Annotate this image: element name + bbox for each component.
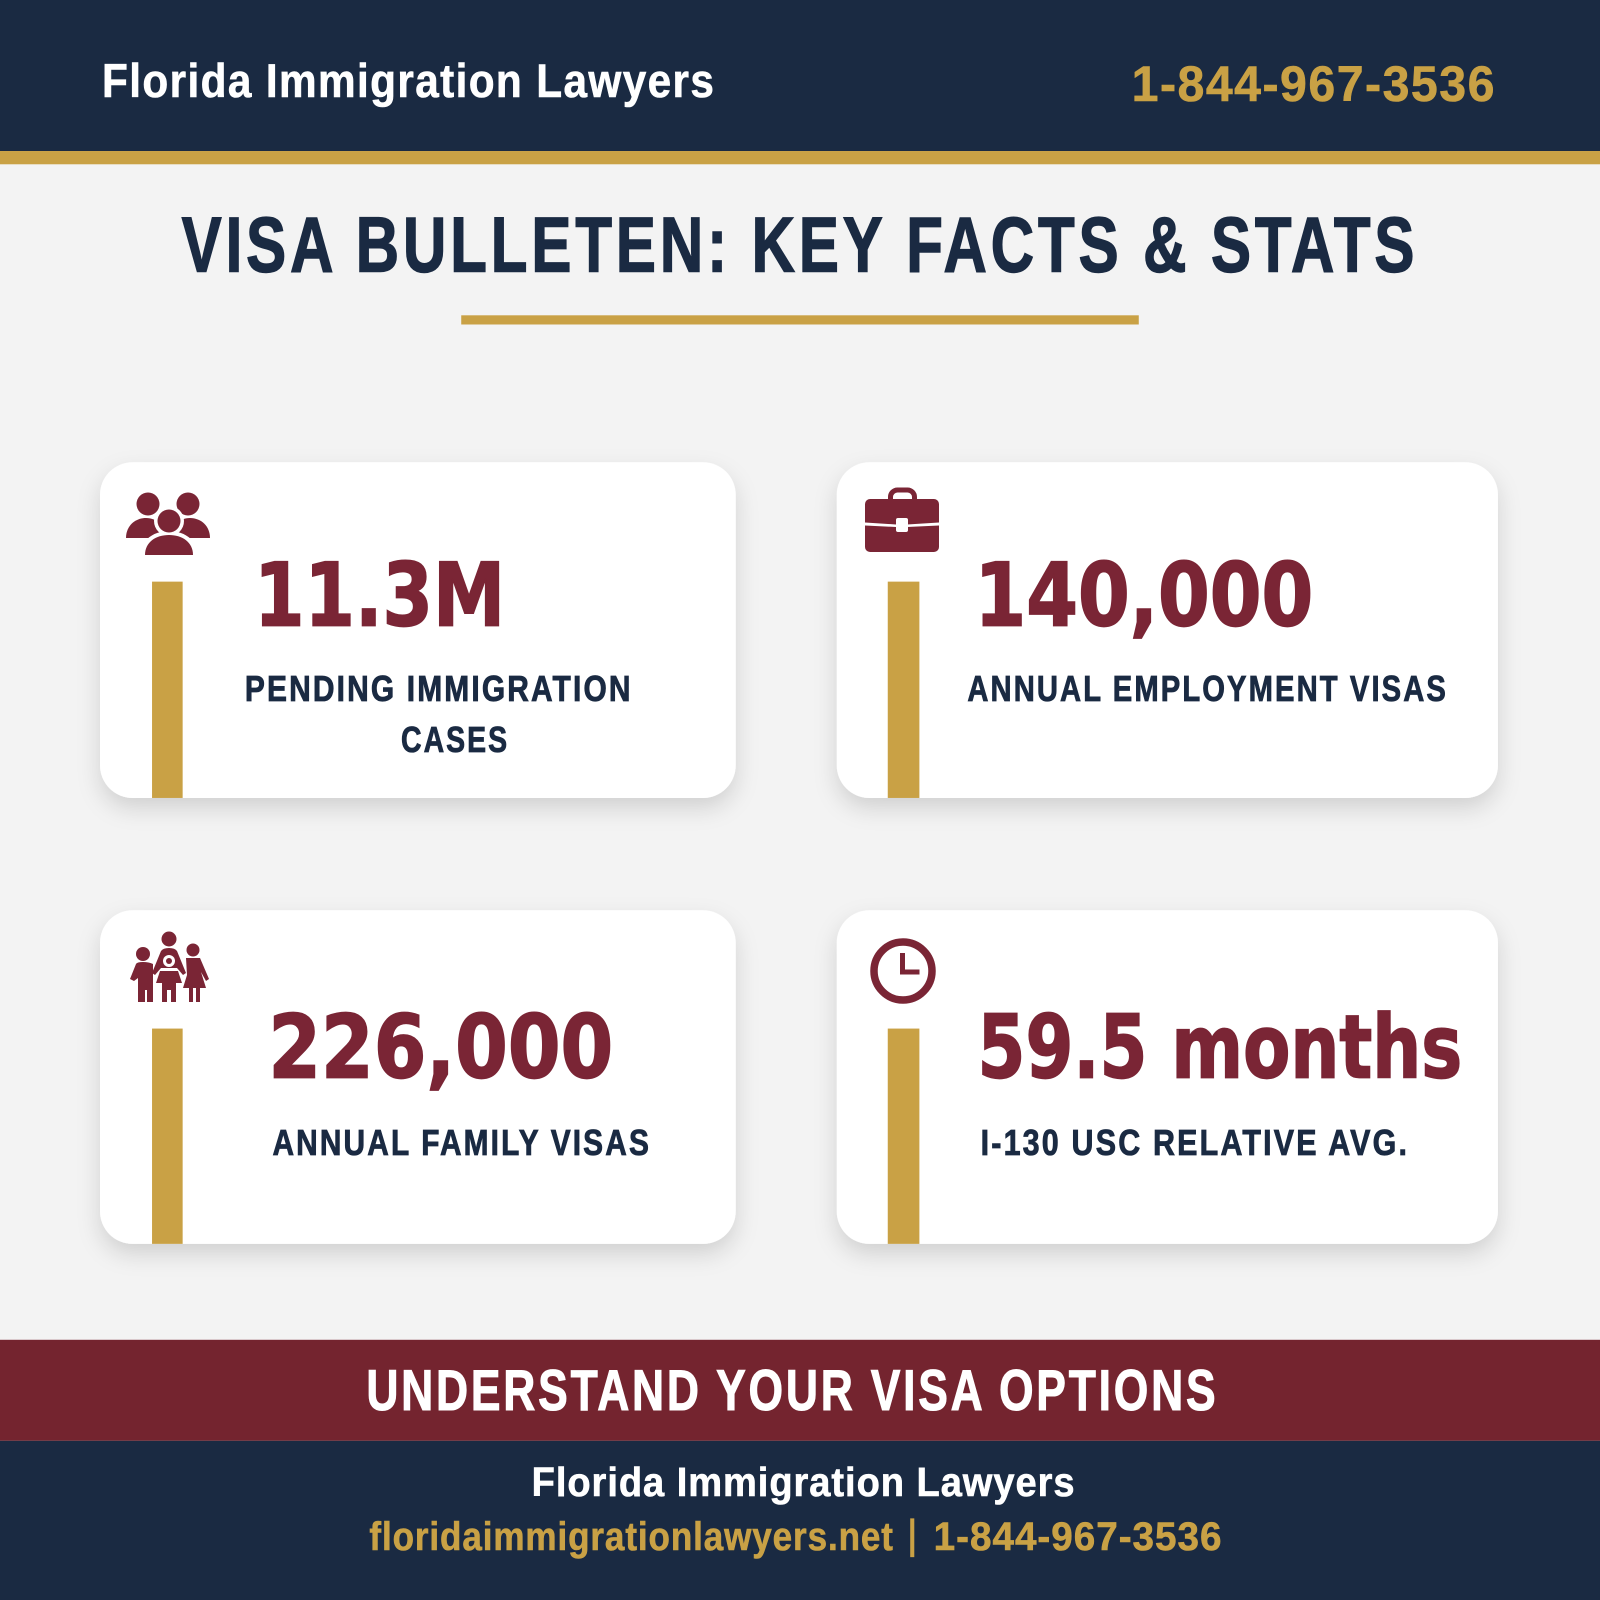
icon: briefcase [865, 490, 939, 552]
stat label: ANNUAL EMPLOYMENT VISAS [967, 669, 1448, 709]
stat number: 59.5 months [978, 997, 1462, 1099]
stat label: PENDING IMMIGRATION [245, 669, 633, 709]
accent bar [152, 1029, 183, 1244]
footer firm name: Florida Immigration Lawyers [532, 1459, 1076, 1505]
stat number: 140,000 [974, 545, 1313, 647]
header phone number: 1-844-967-3536 [1132, 56, 1496, 112]
footer [0, 1441, 1600, 1600]
panel: annual employment visas [837, 462, 1498, 798]
stat label: ANNUAL FAMILY VISAS [272, 1123, 651, 1163]
panel: I-130 relative average wait [837, 910, 1498, 1244]
stat label: I-130 USC RELATIVE AVG. [981, 1123, 1409, 1163]
footer contact line: 1-844-967-3536 [934, 1515, 1222, 1559]
accent bar [888, 1029, 919, 1244]
stat label: CASES [401, 720, 509, 760]
panel: pending immigration cases [100, 462, 736, 798]
header firm name: Florida Immigration Lawyers [102, 55, 715, 107]
accent bar [152, 582, 183, 798]
footer contact line: floridaimmigrationlawyers.net [369, 1515, 894, 1559]
call-to-action banner [0, 1340, 1600, 1441]
stat number: 11.3M [254, 545, 505, 647]
stat number: 226,000 [268, 997, 613, 1099]
header band [0, 0, 1600, 164]
banner text: UNDERSTAND YOUR VISA OPTIONS [366, 1359, 1218, 1423]
icon: family [130, 932, 209, 1002]
panel: annual family visas [100, 910, 736, 1244]
icon: clock [874, 942, 932, 1000]
title underline [461, 315, 1139, 324]
accent bar [888, 582, 919, 798]
icon: group of people [126, 493, 210, 558]
footer contact line [369, 1515, 1222, 1559]
stat label [245, 669, 633, 760]
